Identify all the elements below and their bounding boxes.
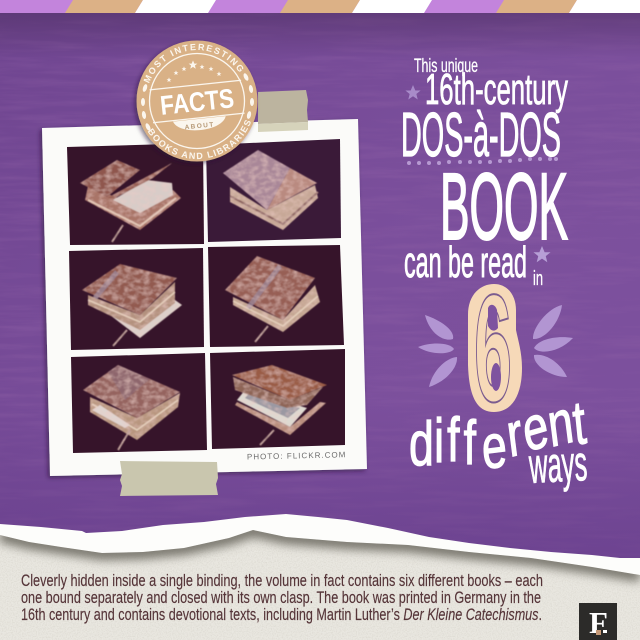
photo 4: third book open below <box>208 245 344 347</box>
curved word: different: different <box>409 387 589 483</box>
paper surface <box>0 530 640 640</box>
photo credit: PHOTO: FLICKR.COM <box>247 450 347 461</box>
masking tape: top right of frame <box>258 90 308 132</box>
big numeral 6 <box>468 263 522 434</box>
headline line: in: in <box>533 268 543 290</box>
stars row <box>167 60 221 82</box>
icon: star near 16th-century <box>405 85 421 99</box>
photo frame with six book photos <box>42 119 367 476</box>
white photo frame <box>42 119 367 476</box>
headline <box>401 56 568 290</box>
logo <box>579 603 617 640</box>
headline line: This unique: This unique <box>414 56 478 77</box>
dotted divider <box>407 157 558 165</box>
masking tape: bottom of frame <box>120 461 218 496</box>
headline line: can be read: can be read <box>404 238 527 287</box>
photo 1: first book open <box>67 143 204 245</box>
curved bottom label: BOOKS AND LIBRARIES <box>148 120 251 160</box>
logo: F <box>589 605 608 640</box>
explanatory paragraph: 16th century and contains devotional texts, including Martin Luther’s Der Kleine Catechismus. <box>21 605 542 624</box>
top striped band <box>0 0 640 13</box>
photo 3: second book open below <box>69 248 204 350</box>
curved top label: MOST INTERESTING <box>144 44 244 84</box>
icon: star near can be read <box>533 246 551 262</box>
ABOUT lens <box>173 116 227 133</box>
left leaf burst <box>418 315 457 387</box>
badge: most interesting facts about books and libraries <box>132 40 258 166</box>
badge: most interesting facts about books and libraries: ABOUT <box>184 121 215 131</box>
explanatory paragraph <box>21 571 543 624</box>
banner lines <box>150 80 245 123</box>
right leaf burst <box>533 305 573 377</box>
photo 6: fifth book open wide <box>210 349 345 449</box>
photo 2: book closed, pale cover <box>206 139 341 242</box>
torn white edge <box>0 514 640 640</box>
FACTS word: FACTS <box>159 83 235 121</box>
ring dashes <box>141 73 254 131</box>
big numeral 6: 6 <box>474 263 512 434</box>
photo 5: fourth book open below <box>71 353 207 453</box>
torn paper footer <box>0 514 640 640</box>
